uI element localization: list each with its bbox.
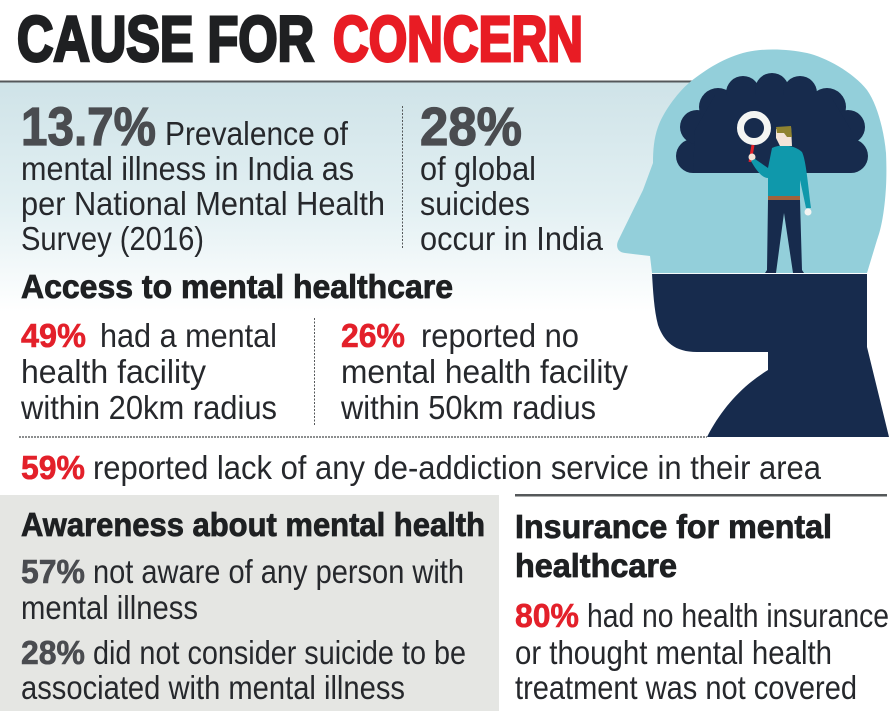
stat: prevalence of mental illness: Prevalence of [165, 115, 349, 152]
stat: prevalence of mental illness: 13.7% [21, 97, 156, 157]
stat: 57 percent: 57% [21, 553, 85, 590]
stat: 49 percent facility within 20km: had a mental [100, 317, 277, 354]
stat: 26 percent no facility within 50km: reported no [421, 317, 579, 354]
stat: prevalence of mental illness: mental illness in India as [21, 150, 354, 187]
stat: 57 percent: mental illness [21, 589, 198, 626]
title: CONCERN [333, 3, 583, 75]
stat: 80 percent: 80% [515, 597, 579, 634]
stat: prevalence of mental illness [21, 97, 385, 257]
title [17, 3, 583, 75]
stat: 26 percent no facility within 50km: 26% [341, 317, 405, 354]
stat: 49 percent facility within 20km: within 20km radius [20, 389, 277, 426]
heading: insurance [515, 508, 832, 584]
stat: 49 percent facility within 20km: health facility [21, 353, 206, 390]
stat: 26 percent no facility within 50km [340, 317, 628, 426]
panel: key statistics background [0, 82, 720, 312]
heading: access to mental healthcare: Access to mental healthcare [21, 268, 453, 305]
stat: global suicides: occur in India [420, 220, 604, 257]
stat: 28 percent [21, 634, 466, 706]
stat: 26 percent no facility within 50km: within 50km radius [340, 389, 596, 426]
stat: 26 percent no facility within 50km: mental health facility [341, 353, 628, 390]
head upper [617, 49, 886, 273]
stat: 80 percent [515, 597, 889, 706]
stat: prevalence of mental illness: per National Mental Health [21, 185, 385, 222]
stat: global suicides: suicides [420, 185, 530, 222]
stat: 80 percent: or thought mental health [515, 634, 832, 671]
stat: 49 percent facility within 20km: 49% [21, 317, 86, 354]
stat: prevalence of mental illness: Survey (2016) [21, 220, 204, 257]
stat: 28 percent: 28% [21, 634, 85, 671]
stat: 28 percent: associated with mental illness [21, 669, 405, 706]
stat: de-addiction service: 59% [21, 449, 85, 486]
stat: global suicides: 28% [420, 97, 522, 157]
stat: 57 percent [21, 553, 464, 626]
heading: awareness: Awareness about mental health [21, 506, 485, 543]
stat: global suicides: of global [420, 150, 536, 187]
stat: 49 percent facility within 20km [20, 317, 277, 426]
illustration: head with person examining brain [617, 49, 889, 437]
panel: insurance for mental healthcare [515, 494, 889, 706]
icon: brain cloud [676, 73, 868, 173]
heading: insurance: Insurance for mental [515, 508, 832, 545]
stat: global suicides [420, 97, 604, 257]
icon: person with magnifier [740, 114, 812, 273]
stat: 28 percent: did not consider suicide to be [93, 634, 466, 671]
stat: de-addiction service: reported lack of any de-addiction service in their area [93, 449, 822, 486]
panel: awareness about mental health [0, 495, 499, 711]
heading: insurance: healthcare [515, 547, 677, 584]
stat: 57 percent: not aware of any person with [93, 553, 464, 590]
head lower neck [652, 274, 889, 437]
title: CAUSE FOR [17, 3, 314, 75]
